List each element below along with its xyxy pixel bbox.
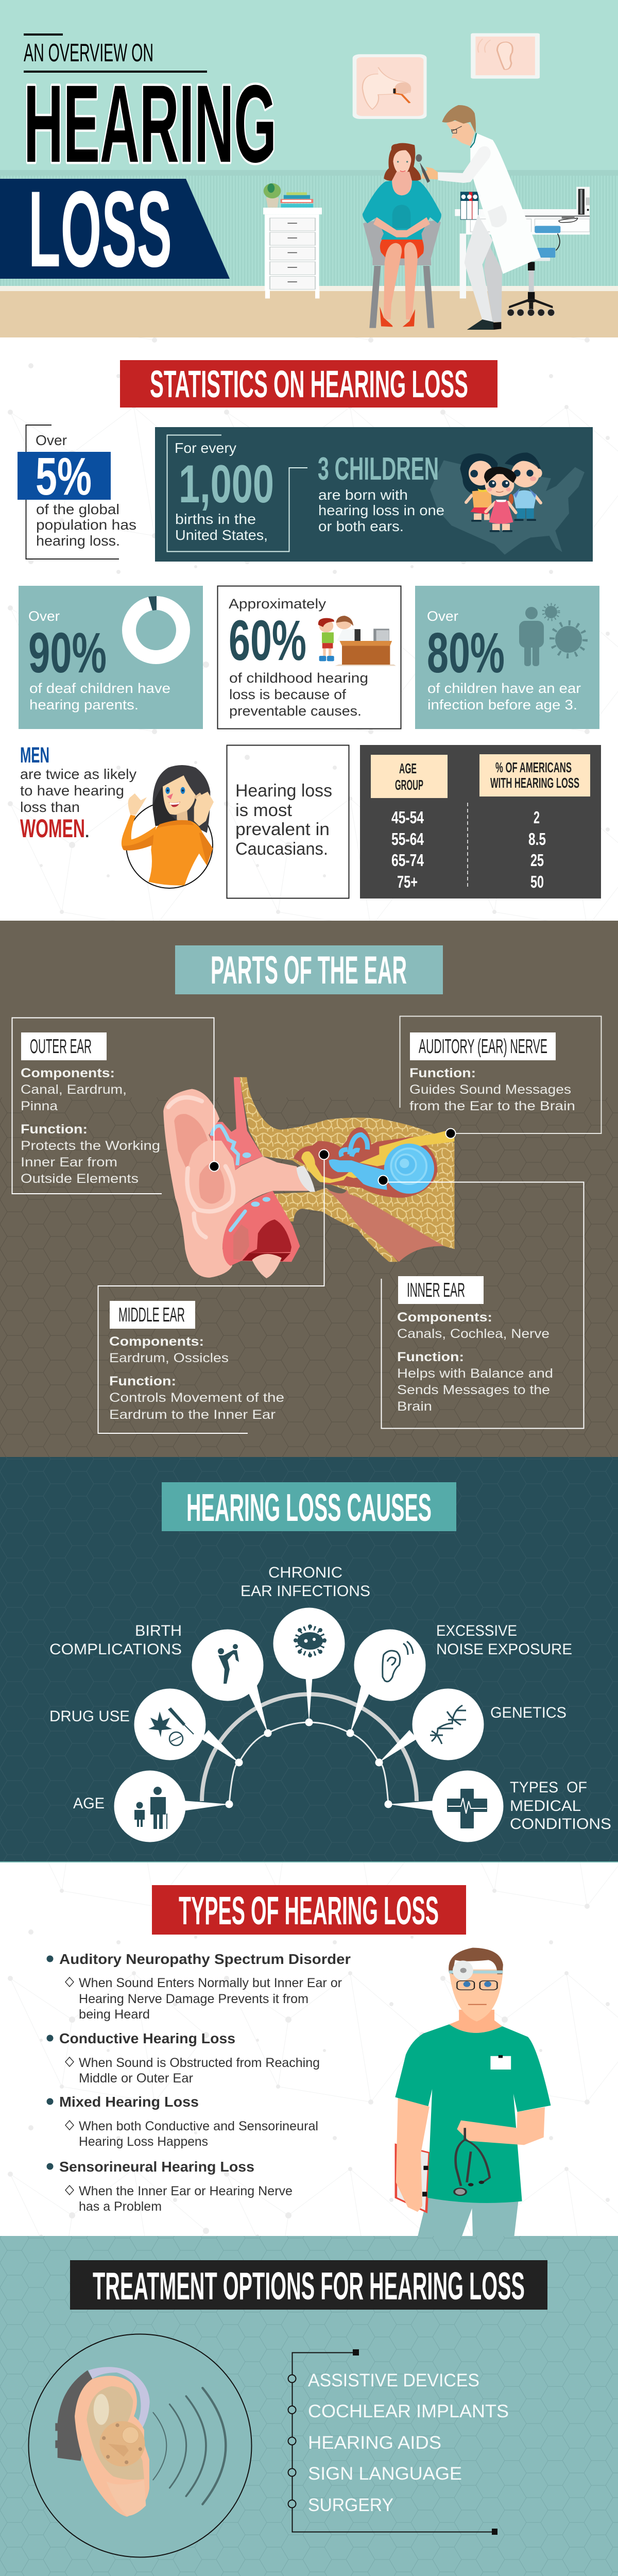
callout: inner ear: Brain	[397, 1399, 432, 1414]
pocket	[490, 2056, 511, 2070]
temporal bone	[239, 1077, 454, 1249]
cause: genetics: GENETICS	[490, 1704, 566, 1721]
panel: births and children: United States,	[175, 527, 268, 543]
canal wedge	[324, 1188, 444, 1262]
list item: conductive: Middle or Outer Ear	[79, 2071, 193, 2086]
list item: sensorineural: When the Inner Ear or Hearing Nerve	[79, 2184, 293, 2198]
list item: sensorineural: has a Problem	[79, 2199, 162, 2214]
small girl	[484, 467, 517, 532]
cause: excessive noise exposure: EXCESSIVE	[436, 1622, 517, 1639]
stat: 5 percent of global population: population has	[36, 517, 136, 533]
callout: middle ear	[98, 1150, 329, 1433]
callout: middle ear: Controls Movement of the	[109, 1391, 284, 1405]
panel: 80 percent: Over	[427, 608, 458, 624]
section background	[0, 921, 618, 1457]
panel: 60 percent: 60%	[229, 609, 306, 672]
stethoscope	[456, 2128, 490, 2186]
cause: age	[73, 1770, 185, 1842]
callout: inner ear: INNER EAR	[407, 1279, 465, 1301]
wall chart: inner ear	[353, 54, 426, 119]
list item: auditory neuropathy: being Heard	[79, 2007, 150, 2022]
wall chart: outer ear	[471, 33, 540, 79]
icon: child at doctor desk	[318, 616, 396, 666]
callout: middle ear: Eardrum to the Inner Ear	[109, 1408, 276, 1422]
cause: birth complications	[49, 1622, 264, 1701]
section background	[0, 1457, 618, 1862]
list item: conductive: Conductive Hearing Loss	[59, 2030, 235, 2046]
cause: chronic ear infections	[241, 1564, 370, 1680]
panel: 90 percent: Over	[28, 608, 60, 624]
map of the united states	[430, 460, 585, 555]
table rows: 55-64	[391, 829, 424, 849]
network dot background	[0, 337, 618, 921]
stat: 5 percent of global population: of the global	[36, 501, 119, 517]
callout: inner ear	[378, 1176, 584, 1428]
panel: 60 percent: preventable causes.	[229, 703, 362, 719]
icon: woman cupping ears	[122, 765, 214, 888]
list: treatment options: COCHLEAR IMPLANTS	[308, 2401, 509, 2421]
panel: 60 percent: loss is because of	[229, 687, 347, 702]
list: treatment options	[288, 2349, 509, 2535]
list: treatment options: HEARING AIDS	[308, 2433, 441, 2453]
panel: prevalent in caucasians: is most	[235, 801, 293, 820]
cause: drug use	[49, 1689, 206, 1760]
callout: inner ear: Sends Messages to the	[397, 1383, 550, 1397]
trousers	[418, 2196, 519, 2236]
clipboard	[396, 2144, 430, 2212]
hearing loss causes section	[0, 1457, 618, 1862]
title: an overview on: AN OVERVIEW ON	[24, 39, 153, 67]
callout: middle ear: Function:	[109, 1374, 176, 1388]
ear	[75, 2376, 149, 2517]
panel: 90 percent: hearing parents.	[29, 697, 139, 713]
illustration: ear anatomy	[163, 1077, 454, 1278]
icon: adult and child	[134, 1787, 167, 1829]
cause: birth complications: BIRTH	[135, 1622, 182, 1639]
arm right	[457, 2107, 545, 2145]
title: an overview on	[24, 33, 207, 73]
examination desk	[455, 209, 590, 298]
title banner: loss	[0, 168, 230, 290]
stat: 5 percent of global population: 5%	[36, 447, 92, 506]
list item: conductive	[46, 2030, 320, 2086]
list item: auditory neuropathy: Auditory Neuropathy Spectrum Disorder	[59, 1951, 351, 1967]
callout: outer ear: Components:	[21, 1066, 115, 1080]
chair	[363, 201, 441, 328]
head mirror	[449, 1971, 503, 1974]
arc diagram	[183, 1674, 435, 1811]
list item: sensorineural: Sensorineural Hearing Loss	[59, 2159, 254, 2175]
statistics section	[0, 337, 618, 921]
binders	[460, 192, 478, 219]
hero section	[0, 0, 618, 337]
panel: prevalent in caucasians: Caucasians.	[235, 839, 328, 859]
hearing aid tube	[89, 2367, 150, 2432]
panel: births and children: 3 CHILDREN	[318, 451, 439, 487]
panel: 60 percent: Approximately	[229, 596, 327, 612]
icon: ear with sound waves	[383, 1641, 413, 1682]
list item: auditory neuropathy	[46, 1951, 351, 2022]
hero illustration: patient, doctor and equipment	[363, 105, 590, 330]
stat: 5 percent of global population: hearing loss.	[36, 533, 120, 549]
stat: men twice as likely: to have hearing	[20, 783, 124, 799]
illustration: ear with hearing aid	[29, 2334, 251, 2557]
panel: prevalent in caucasians: Hearing loss	[235, 781, 332, 801]
table rows: 8.5	[528, 829, 546, 849]
panel: 80 percent: infection before age 3.	[427, 697, 577, 713]
cause: birth complications: COMPLICATIONS	[49, 1641, 182, 1658]
parts of the ear section	[0, 921, 618, 1457]
eardrum	[297, 1166, 315, 1192]
callout: auditory nerve	[400, 1016, 602, 1139]
types of hearing loss section	[0, 1862, 618, 2236]
hearing aid body	[58, 2370, 92, 2461]
table rows: 2	[534, 808, 540, 827]
tails	[183, 1674, 435, 1811]
panel: 80 percent: of children have an ear	[427, 681, 581, 696]
callout: middle ear: MIDDLE EAR	[118, 1304, 185, 1326]
cochlea	[384, 1144, 434, 1194]
inner ear cavity	[294, 1127, 437, 1198]
treatment options section	[0, 2236, 618, 2576]
icon: three children	[460, 452, 542, 532]
sphygmomanometer	[576, 187, 590, 215]
callout: outer ear: Inner Ear from	[21, 1155, 117, 1170]
title banner: loss: LOSS	[28, 168, 172, 290]
table rows: 50	[530, 872, 544, 891]
heading: hearing loss causes	[162, 1482, 456, 1531]
cabinet with drawers	[263, 208, 322, 298]
icon: medical cross with heartbeat	[448, 1789, 487, 1828]
panel: births and children: are born with	[318, 487, 408, 503]
table rows: 75+	[397, 872, 418, 891]
callout: auditory nerve: Guides Sound Messages	[409, 1082, 571, 1097]
callout: inner ear: Components:	[397, 1310, 492, 1325]
callout: middle ear: Components:	[109, 1334, 204, 1349]
left girl	[460, 453, 498, 522]
callout: outer ear: Outside Elements	[21, 1172, 139, 1186]
list item: sensorineural	[46, 2159, 293, 2214]
donut chart: 90 percent	[129, 596, 183, 657]
network dot background	[0, 1862, 618, 2236]
table header: age group: GROUP	[395, 777, 423, 793]
icon: child and viruses	[519, 604, 585, 666]
cause: types of medical conditions: CONDITIONS	[510, 1816, 611, 1833]
table header: age group: AGE	[399, 760, 417, 776]
callout: outer ear: Function:	[21, 1122, 88, 1137]
panel: births and children	[155, 427, 593, 562]
stool and cuff	[507, 226, 560, 316]
callout: outer ear: Pinna	[21, 1099, 58, 1113]
cause: types of medical conditions: MEDICAL	[510, 1798, 581, 1815]
boy	[505, 452, 542, 521]
panel: births and children: births in the	[175, 511, 256, 527]
hero room background	[0, 0, 618, 337]
list: treatment options: SIGN LANGUAGE	[308, 2464, 462, 2484]
panel: births and children: hearing loss in one	[318, 502, 444, 518]
table rows: 25	[530, 851, 544, 870]
hero section: HEARING	[24, 62, 277, 185]
icon: dna helix	[430, 1705, 466, 1744]
glasses and eyes	[457, 1981, 497, 1990]
list item: mixed	[46, 2094, 318, 2149]
hero illustration: wall charts, cabinet, plant and books	[263, 33, 540, 298]
cause: drug use: DRUG USE	[49, 1708, 130, 1725]
table header: percent of americans	[479, 754, 590, 796]
auditory nerve	[359, 1129, 454, 1166]
panel: 60 percent	[217, 586, 401, 728]
callout: inner ear: Canals, Cochlea, Nerve	[397, 1327, 550, 1341]
blue vessel	[212, 1126, 238, 1165]
panel: 80 percent: 80%	[427, 621, 505, 685]
panel: 80 percent	[415, 586, 599, 729]
stat: 5 percent of global population	[18, 425, 136, 559]
sound waves	[153, 2413, 166, 2480]
callout: auditory nerve: Function:	[409, 1066, 476, 1080]
list item: mixed: Hearing Loss Happens	[79, 2134, 208, 2149]
stat: men twice as likely: loss than	[20, 799, 80, 815]
table rows: 65-74	[391, 851, 424, 870]
heading: parts of the ear: PARTS OF THE EAR	[211, 948, 407, 992]
patient	[363, 143, 441, 327]
list: treatment options: SURGERY	[308, 2495, 393, 2515]
section background	[0, 2236, 618, 2576]
callout: auditory nerve: from the Ear to the Brain	[409, 1099, 575, 1113]
icon: adult holding child	[218, 1644, 239, 1684]
stack of books	[281, 192, 313, 208]
list item: mixed: When both Conductive and Sensorineural	[79, 2119, 318, 2133]
ossicles	[301, 1151, 362, 1183]
callout: outer ear: Protects the Working	[21, 1139, 160, 1153]
heading: statistics on hearing loss	[120, 360, 497, 408]
panel: births and children: 1,000	[179, 454, 274, 514]
panel: prevalent in caucasians	[227, 745, 349, 899]
ear piece	[99, 2421, 145, 2466]
table rows	[391, 808, 546, 891]
list item: conductive: When Sound is Obstructed from Reaching	[79, 2056, 320, 2070]
pinna	[163, 1089, 314, 1278]
doctor	[416, 105, 541, 330]
stat: men twice as likely: WOMEN	[20, 814, 85, 843]
table rows: 45-54	[391, 808, 424, 827]
stat: men twice as likely: .	[85, 824, 89, 841]
panel: 60 percent: of childhood hearing	[229, 670, 368, 686]
panel: 90 percent	[19, 586, 203, 729]
panel: 90 percent: 90%	[28, 621, 107, 685]
cause: excessive noise exposure: NOISE EXPOSURE	[436, 1641, 572, 1658]
callout: outer ear	[12, 1018, 219, 1194]
cause: chronic ear infections: EAR INFECTIONS	[241, 1583, 370, 1600]
table: americans with hearing loss by age	[360, 745, 601, 899]
list: treatment options: ASSISTIVE DEVICES	[308, 2370, 479, 2391]
lower red tissue	[222, 1191, 300, 1266]
cause: genetics	[412, 1689, 566, 1760]
heading: types of hearing loss	[152, 1885, 466, 1935]
callout: outer ear: Canal, Eardrum,	[21, 1082, 127, 1097]
table header: age group	[371, 755, 448, 798]
stat: men twice as likely	[20, 743, 136, 843]
panel: 90 percent: of deaf children have	[29, 681, 170, 696]
shirt	[395, 2024, 551, 2203]
stat: 5 percent of global population: Over	[36, 432, 67, 448]
icon: leaf, syringe and pill	[148, 1707, 194, 1745]
semicircular canals	[329, 1159, 387, 1190]
icon: germ	[294, 1624, 327, 1657]
cause: chronic ear infections: CHRONIC	[268, 1564, 342, 1581]
cause: excessive noise exposure	[354, 1622, 572, 1701]
stat: men twice as likely: are twice as likely	[20, 766, 136, 782]
cause: age: AGE	[73, 1795, 105, 1812]
cause: types of medical conditions	[432, 1770, 611, 1842]
panel: births and children: For every	[175, 440, 236, 456]
panel: births and children: or both ears.	[318, 518, 404, 534]
list item: auditory neuropathy: Hearing Nerve Damage Prevents it from	[79, 1992, 308, 2006]
callout: inner ear: Function:	[397, 1350, 464, 1364]
arm left	[396, 2097, 430, 2212]
head and neck	[449, 2010, 502, 2033]
heading: parts of the ear	[175, 945, 443, 994]
illustration: doctor in scrubs	[395, 1948, 551, 2236]
cause: types of medical conditions: TYPES OF	[510, 1779, 587, 1796]
panel: prevalent in caucasians: prevalent in	[235, 820, 330, 839]
callout: inner ear: Helps with Balance and	[397, 1366, 553, 1381]
callout: middle ear: Eardrum, Ossicles	[109, 1351, 229, 1365]
potted plant	[264, 183, 281, 208]
list item: auditory neuropathy: When Sound Enters Normally but Inner Ear or	[79, 1976, 342, 1990]
stat: men twice as likely: MEN	[20, 743, 49, 768]
list item: mixed: Mixed Hearing Loss	[59, 2094, 199, 2110]
callout: outer ear: OUTER EAR	[30, 1036, 92, 1058]
red vestibular tissue	[209, 1077, 263, 1170]
